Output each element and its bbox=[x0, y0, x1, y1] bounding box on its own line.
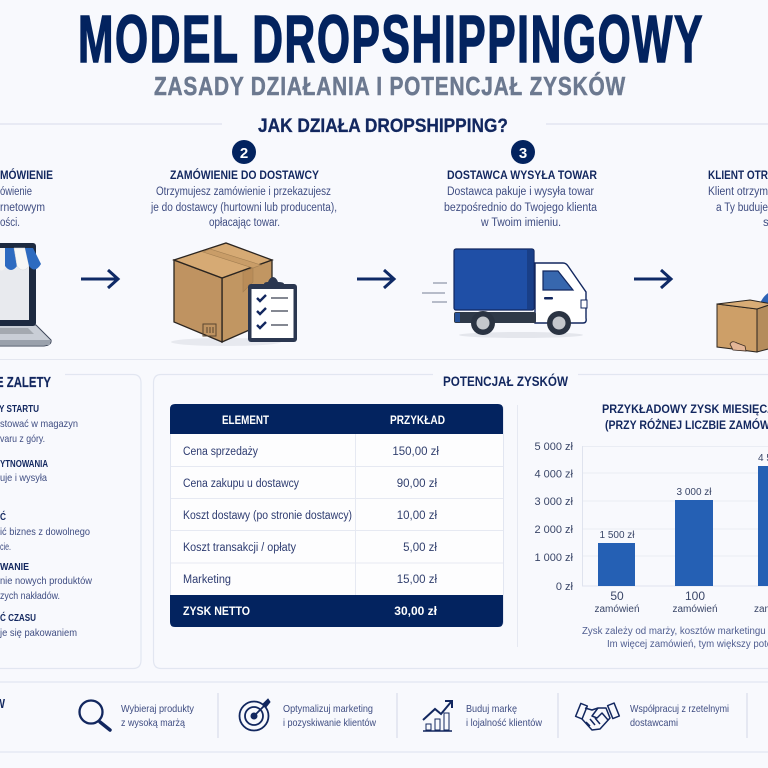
table: profit per order: 150,00 zł bbox=[392, 446, 439, 458]
step 1: customer order: ości. bbox=[0, 217, 20, 229]
table: profit per order: ELEMENT bbox=[222, 415, 269, 427]
advantage: flexibility: Ć bbox=[0, 510, 6, 523]
advantage: low start cost: stować w magazyn bbox=[0, 418, 78, 430]
icon: box with checklist bbox=[171, 243, 297, 346]
advantage: no operations bbox=[0, 458, 48, 484]
tip: choose products: Wybieraj produkty bbox=[121, 703, 195, 715]
icon: growth chart bbox=[423, 701, 452, 731]
step 2: order to supplier: opłacając towar. bbox=[209, 217, 280, 229]
step 3: supplier ships goods: w Twoim imieniu. bbox=[480, 217, 561, 229]
bar chart: monthly profit: 1 500 zł bbox=[599, 530, 635, 541]
tip: reliable suppliers bbox=[576, 703, 729, 730]
advantage: time saving: Ć CZASU bbox=[0, 611, 36, 624]
tip: optimise marketing bbox=[240, 699, 376, 730]
step 3: supplier ships goods: Dostawca pakuje i wysyła towar bbox=[447, 186, 594, 198]
table: profit per order: 90,00 zł bbox=[397, 478, 437, 490]
advantage: no operations: uje i wysyła bbox=[0, 472, 47, 484]
heading: how dropshipping works: JAK DZIAŁA DROPSHIPPING? bbox=[258, 116, 508, 137]
number badge 2 bbox=[232, 140, 256, 164]
icon: magnifier bbox=[80, 700, 110, 730]
advantage: easy testing bbox=[0, 561, 92, 602]
step 1: customer order: MÓWIENIE bbox=[0, 167, 53, 182]
step 2: order to supplier: je do dostawcy (hurtowni lub producenta), bbox=[150, 202, 337, 214]
step 3: supplier ships goods: DOSTAWCA WYSYŁA TOWAR bbox=[447, 168, 597, 182]
bar chart: monthly profit: 0 zł bbox=[556, 581, 574, 593]
step 1: customer order: ówienie bbox=[0, 186, 32, 198]
advantage: low start cost bbox=[0, 403, 78, 445]
arrow 1 bbox=[81, 270, 118, 288]
advantage: time saving bbox=[0, 611, 77, 639]
step 1: customer order: rnetowym bbox=[0, 202, 45, 214]
bar chart: monthly profit: 1 000 zł bbox=[534, 552, 574, 564]
subtitle: ZASADY DZIAŁANIA I POTENCJAŁ ZYSKÓW bbox=[154, 71, 626, 101]
table: profit per order: Koszt transakcji / opłaty bbox=[183, 542, 296, 554]
step 4: customer receives goods bbox=[708, 168, 768, 352]
profit potential heading: POTENCJAŁ ZYSKÓW bbox=[443, 372, 569, 389]
panel: advantages bbox=[0, 374, 141, 668]
advantage: easy testing: WANIE bbox=[0, 561, 29, 573]
panel: profit potential bbox=[154, 372, 768, 668]
bar chart: monthly profit bbox=[534, 402, 768, 615]
bar chart: monthly profit: 50 bbox=[610, 589, 624, 603]
bars bbox=[598, 466, 768, 586]
bar chart: monthly profit: 2 000 zł bbox=[534, 524, 574, 536]
number badge 3 bbox=[511, 140, 535, 164]
tip: choose products bbox=[80, 700, 195, 730]
table: profit per order: Cena zakupu u dostawcy bbox=[183, 478, 299, 490]
tip: reliable suppliers: dostawcami bbox=[630, 717, 678, 729]
step 1: customer order bbox=[0, 167, 53, 346]
icon: laptop shop bbox=[0, 243, 51, 346]
step 2: order to supplier bbox=[150, 140, 337, 346]
advantage: flexibility bbox=[0, 510, 90, 553]
table: profit per order: 10,00 zł bbox=[397, 510, 437, 522]
icon: delivery truck bbox=[422, 249, 587, 338]
tip: choose products: z wysoką marżą bbox=[121, 717, 185, 729]
bar chart: monthly profit: 100 bbox=[685, 589, 705, 603]
bar chart: monthly profit: 4 000 zł bbox=[534, 468, 574, 480]
advantage: low start cost: varu z góry. bbox=[0, 433, 45, 445]
advantage: no operations: YTNOWANIA bbox=[0, 458, 48, 470]
advantage: flexibility: ić biznes z dowolnego bbox=[0, 526, 90, 538]
table: profit per order bbox=[170, 404, 504, 627]
table: profit per order: PRZYKŁAD bbox=[390, 415, 445, 427]
step 2: order to supplier: ZAMÓWIENIE DO DOSTAWCY bbox=[170, 167, 319, 182]
advantage: low start cost: Y STARTU bbox=[0, 403, 39, 415]
chart title bbox=[602, 402, 768, 432]
tip: build brand: i lojalność klientów bbox=[466, 717, 542, 729]
step 3: supplier ships goods: bezpośrednio do Twojego klienta bbox=[444, 202, 598, 214]
arrow 3 bbox=[634, 270, 671, 288]
tip: optimise marketing: Optymalizuj marketing bbox=[283, 703, 373, 715]
table: profit per order: ZYSK NETTO bbox=[183, 606, 250, 618]
advantage: easy testing: nie nowych produktów bbox=[0, 575, 92, 587]
tip: reliable suppliers: Współpracuj z rzetelnymi bbox=[630, 703, 729, 715]
table: profit per order: 15,00 zł bbox=[397, 574, 437, 586]
icon: hands holding a box bbox=[717, 292, 768, 352]
bar chart: monthly profit: zamówień bbox=[672, 604, 718, 615]
tip: build brand bbox=[423, 701, 542, 731]
table: profit per order: Marketing bbox=[183, 574, 231, 586]
advantage: flexibility: cie. bbox=[0, 541, 11, 553]
table: profit per order: 5,00 zł bbox=[403, 542, 437, 554]
chart note bbox=[582, 625, 768, 650]
table: profit per order: Cena sprzedaży bbox=[183, 446, 258, 458]
number badge 3: 3 bbox=[519, 145, 527, 162]
tip: optimise marketing: i pozyskiwanie klientów bbox=[283, 717, 376, 729]
table: profit per order: 30,00 zł bbox=[394, 604, 438, 618]
table: profit per order: Koszt dostawy (po stronie dostawcy) bbox=[183, 510, 352, 522]
advantage: time saving: je się pakowaniem bbox=[0, 627, 77, 639]
arrow 2 bbox=[357, 270, 394, 288]
bar chart: monthly profit: 3 000 zł bbox=[534, 496, 574, 508]
icon: target with dart bbox=[240, 699, 270, 730]
advantage: easy testing: zych nakładów. bbox=[0, 590, 60, 602]
bar chart: monthly profit: 5 000 zł bbox=[534, 441, 574, 453]
step 3: supplier ships goods bbox=[422, 140, 598, 338]
step 2: order to supplier: Otrzymujesz zamówienie i przekazujesz bbox=[156, 186, 331, 198]
number badge 2: 2 bbox=[240, 145, 248, 162]
tip: build brand: Buduj markę bbox=[466, 703, 517, 715]
icon: handshake bbox=[576, 703, 619, 730]
bar chart: monthly profit: 3 000 zł bbox=[676, 487, 712, 498]
bar chart: monthly profit: zamówień bbox=[594, 604, 640, 615]
